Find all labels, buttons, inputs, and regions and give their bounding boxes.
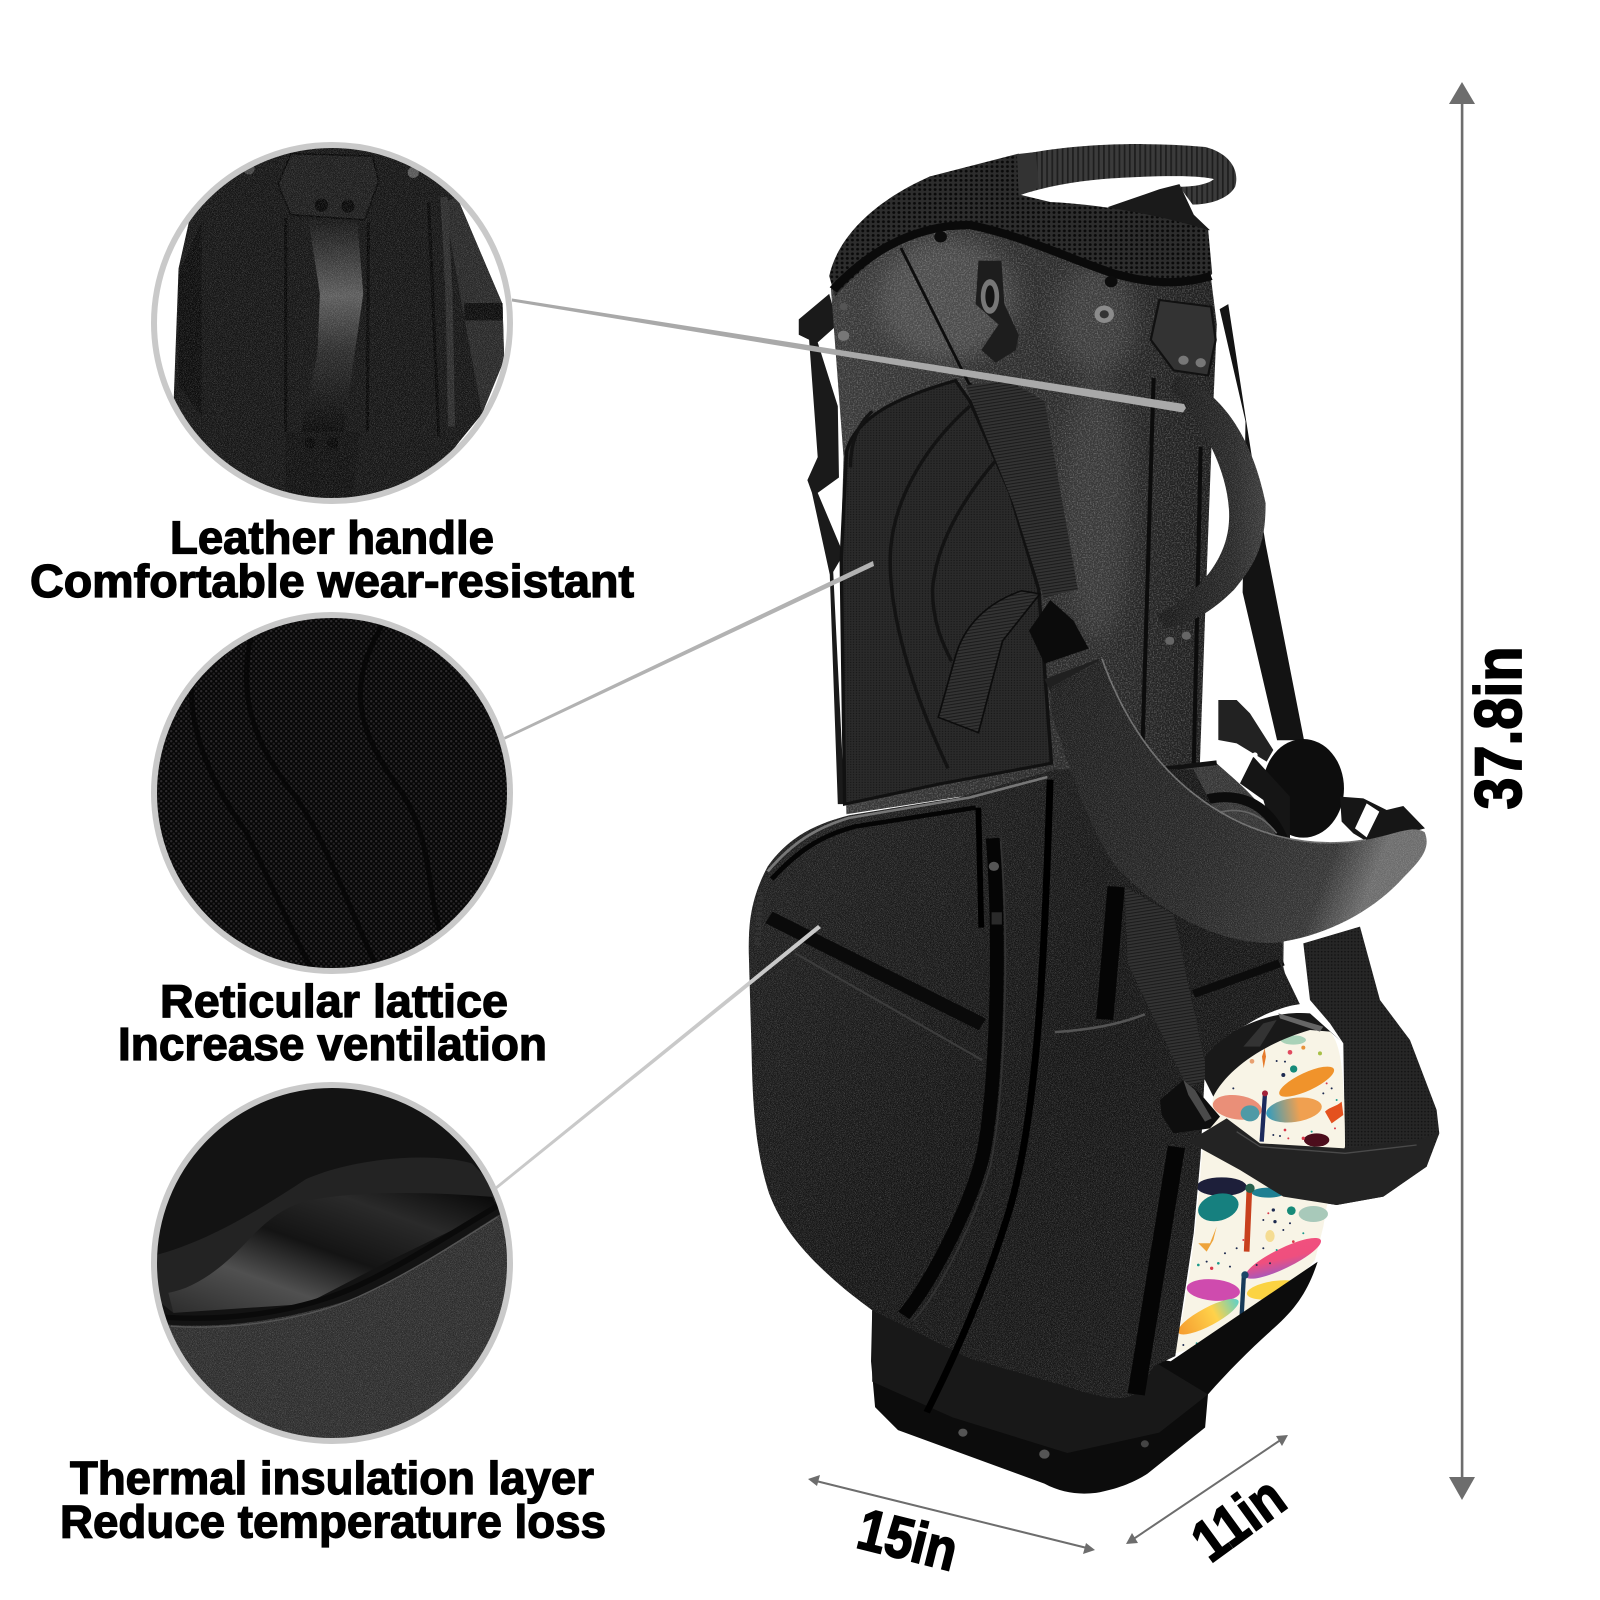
height label: 37.8in	[1461, 646, 1535, 810]
heading: thermal insulation	[60, 1452, 606, 1548]
leader line to insulated pocket	[495, 925, 821, 1189]
detail circle: mesh lattice	[154, 615, 510, 985]
width label: 15in	[851, 1496, 964, 1584]
depth label: 11in	[1180, 1464, 1297, 1574]
dragonfly one	[1211, 1061, 1338, 1142]
width dimension arrow	[808, 1475, 1095, 1554]
printed dragonfly pocket	[1174, 1030, 1345, 1353]
leader line to handle	[512, 298, 1186, 412]
heading: leather handle	[30, 512, 634, 607]
top collar and ribbed carry handle	[829, 144, 1236, 296]
height dimension arrow	[1449, 82, 1475, 1500]
leader line to mesh	[504, 561, 874, 740]
detail circle: leather handle	[154, 145, 510, 508]
shoulder pad	[1051, 659, 1427, 943]
dragonfly three	[1174, 1231, 1325, 1341]
heading: reticular lattice: Increase ventilation	[118, 1018, 547, 1070]
lower dome behind shoulder pad	[1157, 763, 1290, 997]
padded mesh back panel	[841, 248, 1051, 804]
lower nylon strap	[1125, 887, 1208, 1088]
heading: thermal insulation: Reduce temperature loss	[60, 1496, 606, 1548]
pocket seams and zippers	[757, 777, 1280, 1412]
upper bag body	[831, 228, 1217, 814]
rear padded strap	[1193, 927, 1439, 1205]
golf bag	[749, 144, 1439, 1494]
side leather handle	[1156, 376, 1266, 628]
front buckle and rivets on bag neck	[838, 231, 1117, 363]
heading: leather handle: Comfortable wear-resistant	[30, 555, 634, 607]
heading: thermal insulation: Thermal insulation layer	[70, 1452, 594, 1504]
lower front pocket body	[749, 769, 1300, 1398]
rear stand legs and black strap	[799, 294, 1304, 804]
heading: leather handle: Leather handle	[170, 512, 494, 564]
heading: reticular lattice	[118, 975, 547, 1070]
heading: reticular lattice: Reticular lattice	[160, 975, 508, 1027]
depth dimension arrow	[1126, 1435, 1288, 1544]
pocket zipper rim	[1205, 1013, 1342, 1097]
small pocket print details	[1182, 1035, 1343, 1349]
detail circle: thermal insulation	[148, 1085, 526, 1458]
lower buckle and rim of padded strap	[1160, 1080, 1437, 1205]
bag base	[871, 1262, 1318, 1494]
leather tab and side panel seams	[1142, 300, 1216, 763]
nylon harness strap and buckle	[938, 382, 1105, 733]
dragonfly two	[1195, 1177, 1285, 1252]
right side hardware behind shoulder pad	[1218, 700, 1425, 853]
